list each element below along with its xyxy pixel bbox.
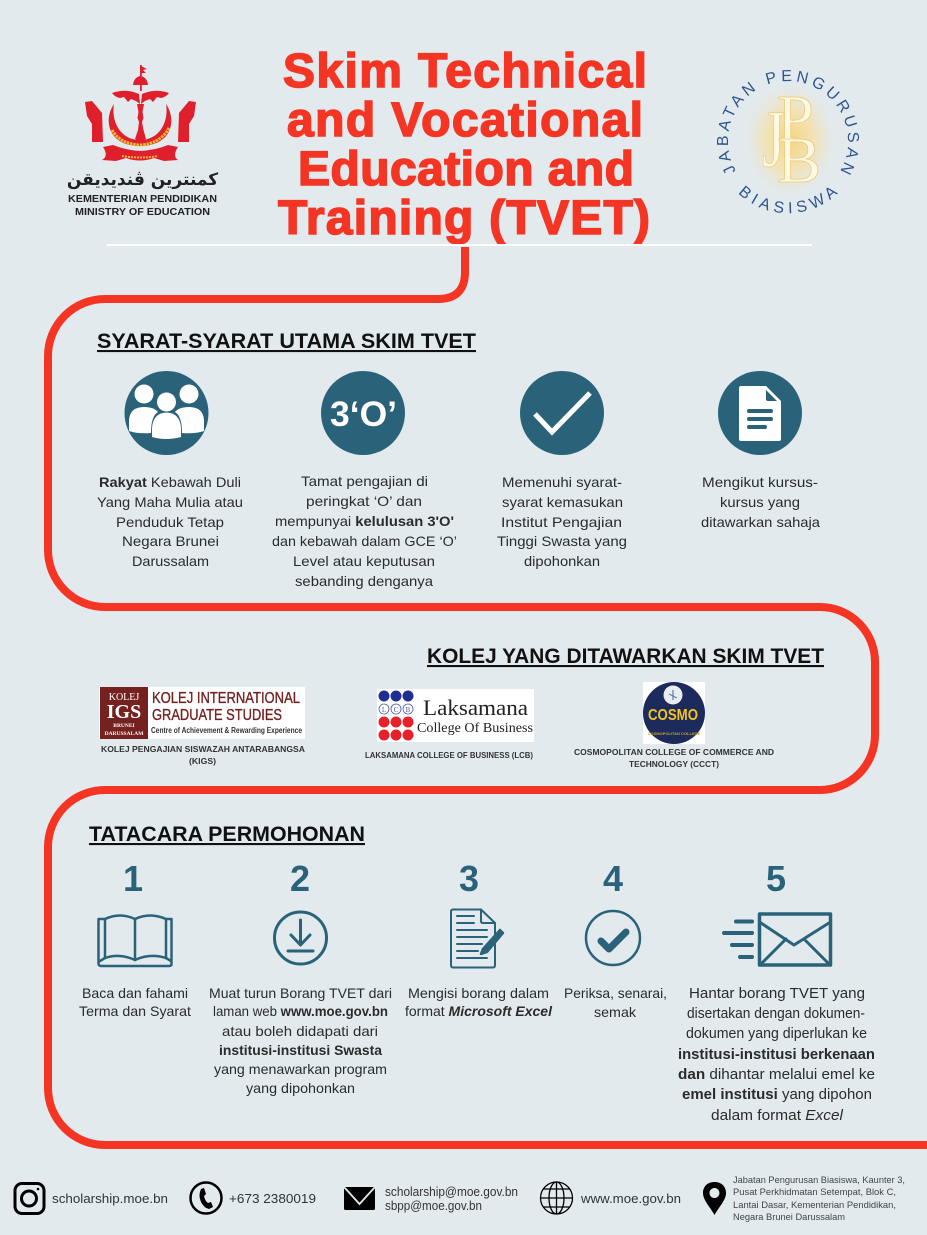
icon: JPB monogram (762, 82, 821, 197)
logo: KIGS: DARUSSALAM (105, 731, 144, 737)
caption: Cosmopolitan: TECHNOLOGY (CCCT) (629, 759, 719, 769)
icon: download (274, 912, 326, 964)
ministry name: KEMENTERIAN PENDIDIKAN (68, 193, 217, 205)
logo: Cosmopolitan: COSMO (648, 707, 698, 724)
text: step 4: semak (594, 1004, 637, 1020)
step 4 (564, 858, 667, 1020)
text: qualifications: peringkat ‘O’ dan (306, 493, 422, 509)
panel: colleges (99, 645, 824, 769)
text: email addresses (385, 1185, 518, 1213)
icon: 3 O levels (321, 371, 405, 455)
circular text top: JABATAN PENGURUSAN (717, 70, 860, 175)
number 3: 3 (459, 858, 479, 899)
text: step 5: emel institusi yang dipohon (682, 1087, 872, 1103)
caption: Laksamana: LAKSAMANA COLLEGE OF BUSINESS (LCB) (365, 750, 533, 760)
caption: KIGS (101, 744, 305, 766)
logo: KIGS: BRUNEI (113, 723, 135, 729)
text: citizens: Penduduk Tetap (116, 514, 224, 530)
text: admission: Tinggi Swasta yang (497, 533, 627, 549)
text: admission: dipohonkan (524, 553, 600, 569)
step 1 (79, 858, 191, 1019)
text: citizens (97, 474, 243, 569)
caption: KIGS: KOLEJ PENGAJIAN SISWAZAH ANTARABANGSA (101, 744, 305, 754)
text: address: Jabatan Pengurusan Biasiswa, Kaunter 3, (733, 1175, 905, 1186)
ministry name (68, 193, 217, 218)
text: step 1: Baca dan fahami (82, 985, 188, 1001)
icon: form and pencil (451, 910, 503, 968)
icon: people (124, 371, 208, 455)
text: step 4 (564, 985, 667, 1020)
logo: Cosmopolitan (643, 682, 705, 744)
icon: left hand (85, 101, 103, 142)
icon: sending envelope (724, 914, 830, 965)
icon: flag and parasol (133, 65, 148, 91)
text: step 5 (678, 986, 875, 1124)
icon: check circle (586, 911, 640, 965)
logo: Laksamana: B (406, 706, 411, 714)
text: step 1: Terma dan Syarat (79, 1003, 191, 1019)
text: step 5: institusi-institusi berkenaan (678, 1047, 875, 1063)
icon: wings (112, 91, 169, 104)
text: step 5: dan dihantar melalui emel ke (678, 1067, 875, 1083)
text: address: Pusat Perkhidmatan Setempat, Blok C, (733, 1187, 896, 1198)
caption: Cosmopolitan (574, 747, 774, 769)
title: Education and (298, 143, 634, 196)
connector line: red flow path linking sections (48, 247, 927, 1145)
text: email addresses: sbpp@moe.gov.bn (385, 1199, 482, 1213)
logo: KIGS (99, 687, 305, 739)
text: citizens: Negara Brunei (122, 533, 219, 549)
text: admission: Memenuhi syarat- (502, 474, 622, 490)
text: courses: ditawarkan sahaja (701, 514, 820, 530)
text: courses: Mengikut kursus- (702, 474, 818, 490)
text: step 3: format Microsoft Excel (405, 1003, 553, 1019)
text: qualifications: Level atau keputusan (293, 553, 435, 569)
icon: central column (135, 104, 146, 142)
circular text bottom: BIASISWA (738, 186, 838, 214)
text: admission (497, 474, 627, 569)
heading: requirements: SYARAT-SYARAT UTAMA SKIM TVET (97, 330, 476, 353)
text: step 2: Muat turun Borang TVET dari (209, 985, 392, 1001)
text: step 5: disertakan dengan dokumen- (687, 1006, 865, 1022)
icon: open book (98, 916, 172, 966)
text: instagram: scholarship.moe.bn (52, 1192, 168, 1206)
divider (107, 244, 812, 246)
icon: globe (540, 1182, 572, 1214)
icon: scroll banner (102, 145, 178, 161)
text: step 2: institusi-institusi Swasta (219, 1042, 382, 1058)
icon: crescent (109, 104, 171, 146)
icon: document (718, 371, 802, 455)
logo: Jabatan Pengurusan Biasiswa (717, 70, 860, 214)
logo: KIGS: KOLEJ INTERNATIONAL (152, 690, 300, 707)
text: step 2 (209, 985, 392, 1096)
logo: Laksamana: C (394, 706, 399, 714)
icon: check mark (520, 371, 604, 455)
icon: JPB monogram: P (777, 82, 814, 155)
heading: procedure: TATACARA PERMOHONAN (89, 823, 365, 846)
logo: KIGS: GRADUATE STUDIES (152, 707, 282, 724)
logo: Laksamana: Laksamana (423, 695, 528, 720)
text: citizens: Yang Maha Mulia atau (97, 494, 243, 510)
logo: KIGS: KOLEJ (109, 692, 139, 703)
icon: instagram (15, 1184, 44, 1214)
text: step 2: atau boleh didapati dari (222, 1023, 378, 1039)
icon: JPB monogram: J (762, 94, 785, 184)
icon: mail (344, 1187, 375, 1210)
caption: Cosmopolitan: COSMOPOLITAN COLLEGE OF COMMERCE AND (574, 747, 774, 757)
title: and Vocational (287, 94, 643, 147)
text: qualifications (272, 473, 457, 589)
step 5 (678, 858, 875, 1124)
panel: requirements (97, 330, 820, 589)
number 1: 1 (123, 858, 143, 899)
step 3 (405, 858, 553, 1019)
text: step 3: Mengisi borang dalam (408, 985, 549, 1001)
text: email addresses: scholarship@moe.gov.bn (385, 1185, 518, 1199)
text: qualifications: mempunyai kelulusan 3'O' (275, 513, 454, 529)
icon: crescent inscription (112, 128, 169, 145)
icon: 3 O levels: 3‘O’ (330, 395, 397, 434)
text: step 5: dokumen yang diperlukan ke (686, 1026, 867, 1042)
text: admission: syarat kemasukan (502, 494, 623, 510)
logo: Laksamana: College Of Business (417, 721, 533, 736)
icon: phone (190, 1182, 222, 1214)
text: qualifications: dan kebawah dalam GCE ‘O’ (272, 533, 457, 549)
icon: right hand (178, 101, 196, 142)
logo: Laksamana: L (382, 706, 386, 714)
text: step 5: dalam format Excel (711, 1108, 844, 1124)
text: courses: kursus yang (720, 494, 800, 510)
logo: Cosmopolitan: COSMOPOLITAN COLLEGE (648, 731, 701, 736)
number 2: 2 (290, 858, 310, 899)
heading: colleges: KOLEJ YANG DITAWARKAN SKIM TVET (427, 645, 824, 668)
text: website: www.moe.gov.bn (580, 1192, 681, 1206)
logo: Ministry of Education crest (67, 65, 218, 218)
ministry name: MINISTRY OF EDUCATION (75, 206, 210, 218)
icon: location pin (703, 1182, 726, 1215)
icon: golden glow (740, 78, 840, 202)
text: address: Negara Brunei Darussalam (733, 1212, 845, 1223)
icon: JPB monogram: B (777, 124, 821, 197)
panel: application procedure (79, 823, 875, 1124)
text: courses (701, 474, 820, 530)
logo: Laksamana (377, 689, 534, 742)
text: step 2: yang dipohonkan (246, 1080, 355, 1096)
caption: KIGS: (KIGS) (189, 756, 216, 766)
text: step 1 (79, 985, 191, 1019)
text: address: Lantai Dasar, Kementerian Pendidikan, (733, 1200, 896, 1211)
text: step 4: Periksa, senarai, (564, 985, 667, 1001)
text: step 3 (405, 985, 553, 1019)
text: qualifications: Tamat pengajian di (301, 473, 428, 489)
text: qualifications: sebanding denganya (295, 573, 433, 589)
logo: KIGS: Centre of Achievement & Rewarding Experience (151, 726, 302, 735)
text: admission: Institut Pengajian (501, 514, 622, 530)
number 4: 4 (603, 858, 623, 899)
connector stub over divider (461, 247, 469, 251)
Jawi ministry name: كمنترين ڤنديديقن (67, 170, 218, 190)
title (278, 45, 650, 245)
icon: banner inscription (122, 156, 158, 158)
title: Skim Technical (283, 45, 647, 98)
text: phone: +673 2380019 (229, 1192, 316, 1206)
title: Training (TVET) (278, 192, 650, 245)
step 2 (209, 858, 392, 1096)
footer: contact details (15, 1175, 905, 1223)
text: step 2: yang menawarkan program (214, 1061, 387, 1077)
text: step 5: Hantar borang TVET yang (689, 986, 865, 1002)
number 5: 5 (766, 858, 786, 899)
text: citizens: Rakyat Kebawah Duli (99, 474, 241, 490)
text: citizens: Darussalam (132, 553, 209, 569)
text: step 2: laman web www.moe.gov.bn (213, 1003, 388, 1019)
text: address (733, 1175, 905, 1223)
logo: KIGS: IGS (107, 701, 141, 723)
